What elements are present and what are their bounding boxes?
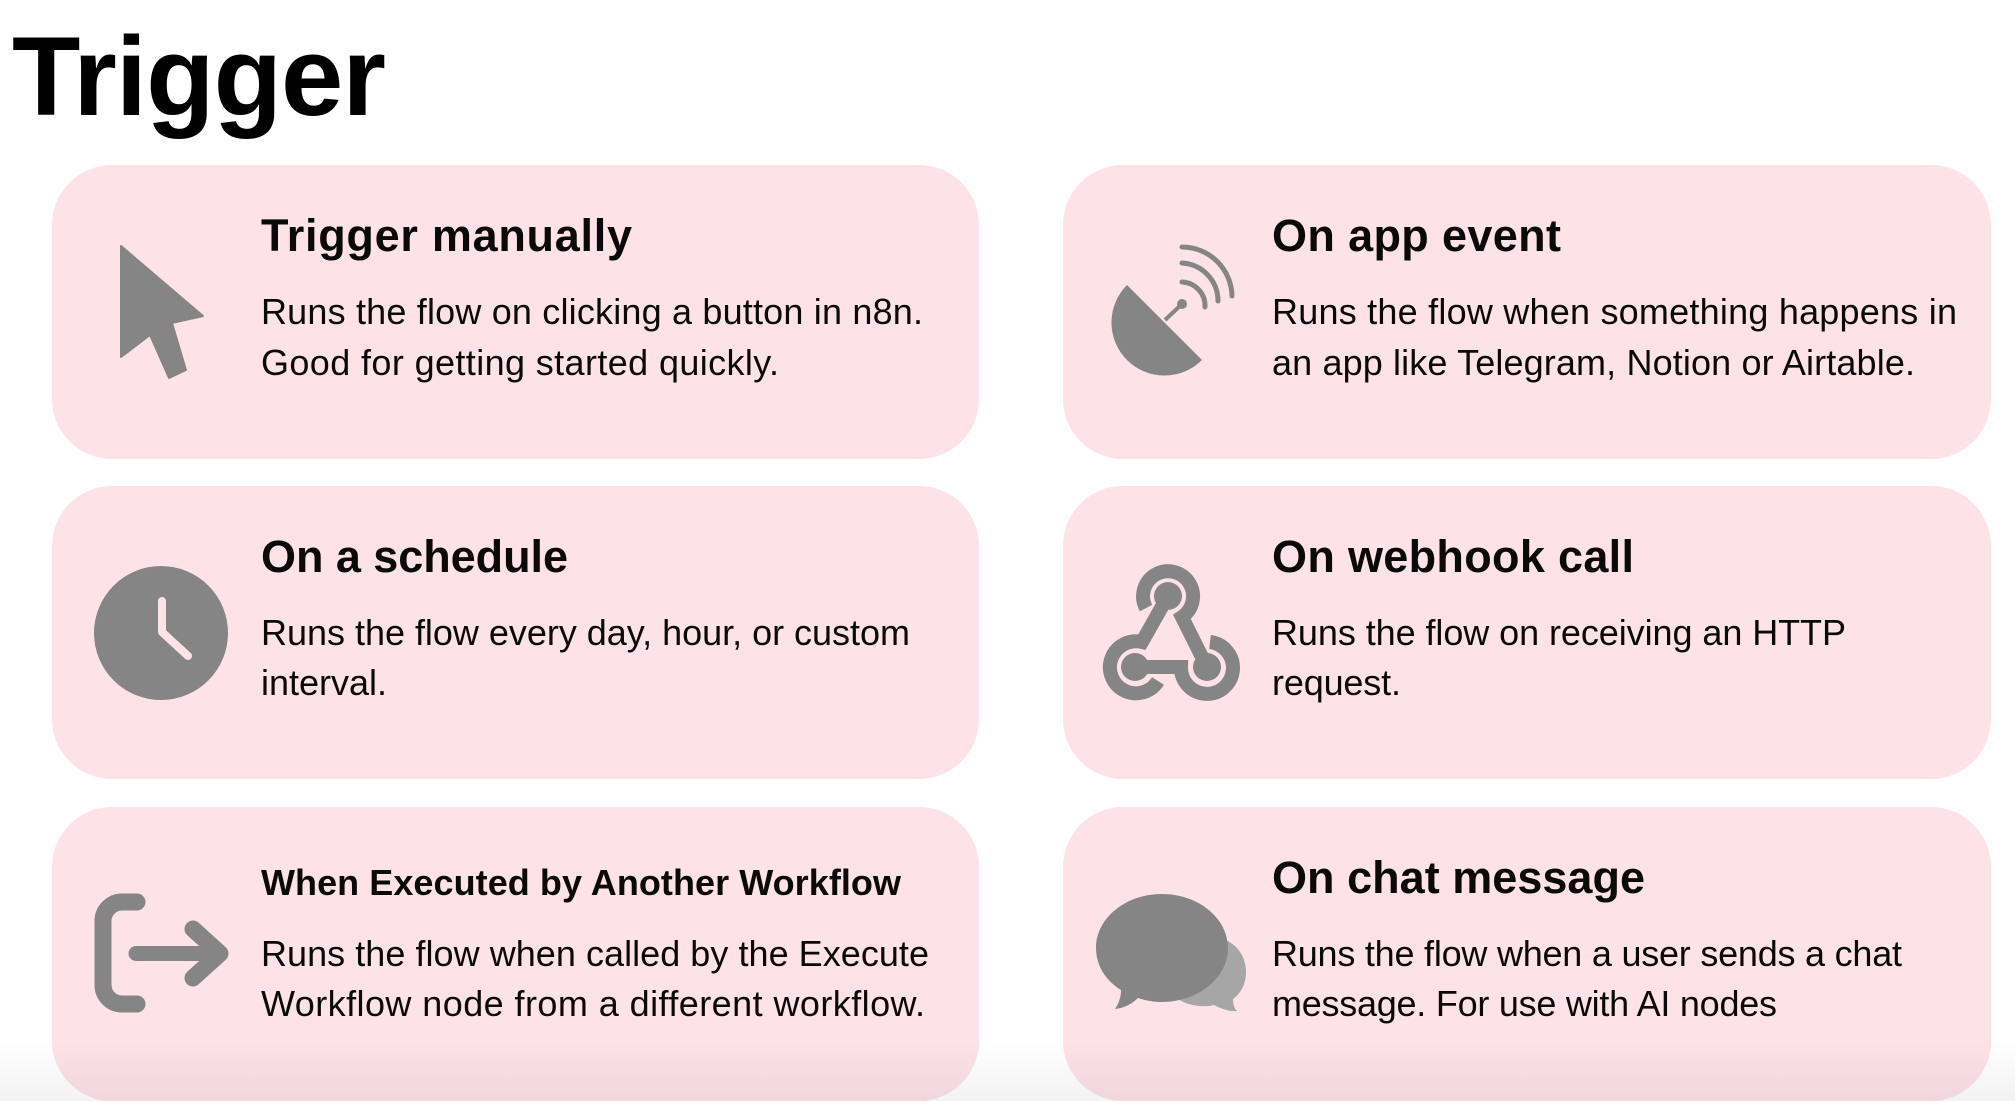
description: on webhook call: Runs the flow on receiving an HTTP — [1272, 612, 1846, 653]
icon: exit arrow — [103, 902, 220, 1004]
icon: webhook — [1110, 571, 1233, 694]
description: on webhook call — [1272, 612, 1846, 703]
panel: trigger manually — [52, 165, 979, 459]
description: on a schedule: Runs the flow every day, hour, or custom — [261, 612, 910, 653]
panel: on app event — [1063, 165, 1991, 459]
description: on app event: Runs the flow when something happens in — [1272, 291, 1957, 332]
icon: cursor — [121, 246, 203, 378]
heading: when executed by another workflow: When Executed by Another Workflow — [261, 862, 902, 903]
heading: on webhook call: On webhook call — [1272, 531, 1634, 582]
description: when executed by another workflow — [261, 933, 929, 1024]
heading: on chat message: On chat message — [1272, 852, 1645, 903]
description: when executed by another workflow: Runs the flow when called by the Execute — [261, 933, 929, 974]
description: trigger manually — [261, 291, 923, 383]
description: on webhook call: request. — [1272, 662, 1401, 703]
description: on chat message: message. For use with AI nodes — [1272, 983, 1777, 1024]
description: on app event: an app like Telegram, Notion or Airtable. — [1272, 342, 1915, 383]
description: on chat message — [1272, 933, 1902, 1024]
description: trigger manually: Runs the flow on clicking a button in n8n. — [261, 291, 923, 332]
title: Trigger — [12, 14, 386, 139]
panel: on chat message — [1063, 807, 1991, 1101]
panel: on a schedule — [52, 486, 979, 779]
heading: on a schedule: On a schedule — [261, 531, 568, 582]
description: trigger manually: Good for getting started quickly. — [261, 342, 779, 383]
icon: satellite dish — [1111, 247, 1232, 376]
description: on chat message: Runs the flow when a user sends a chat — [1272, 933, 1902, 974]
description: on a schedule — [261, 612, 910, 703]
heading: trigger manually: Trigger manually — [261, 210, 632, 261]
description: on a schedule: interval. — [261, 662, 387, 703]
icon: clock — [94, 566, 228, 700]
description: when executed by another workflow: Workflow node from a different workflow. — [261, 983, 925, 1024]
icon: chat bubbles — [1096, 894, 1246, 1011]
panel: on webhook call — [1063, 486, 1991, 779]
heading: on app event: On app event — [1272, 210, 1561, 261]
description: on app event — [1272, 291, 1957, 383]
panel: when executed by another workflow — [52, 807, 979, 1101]
